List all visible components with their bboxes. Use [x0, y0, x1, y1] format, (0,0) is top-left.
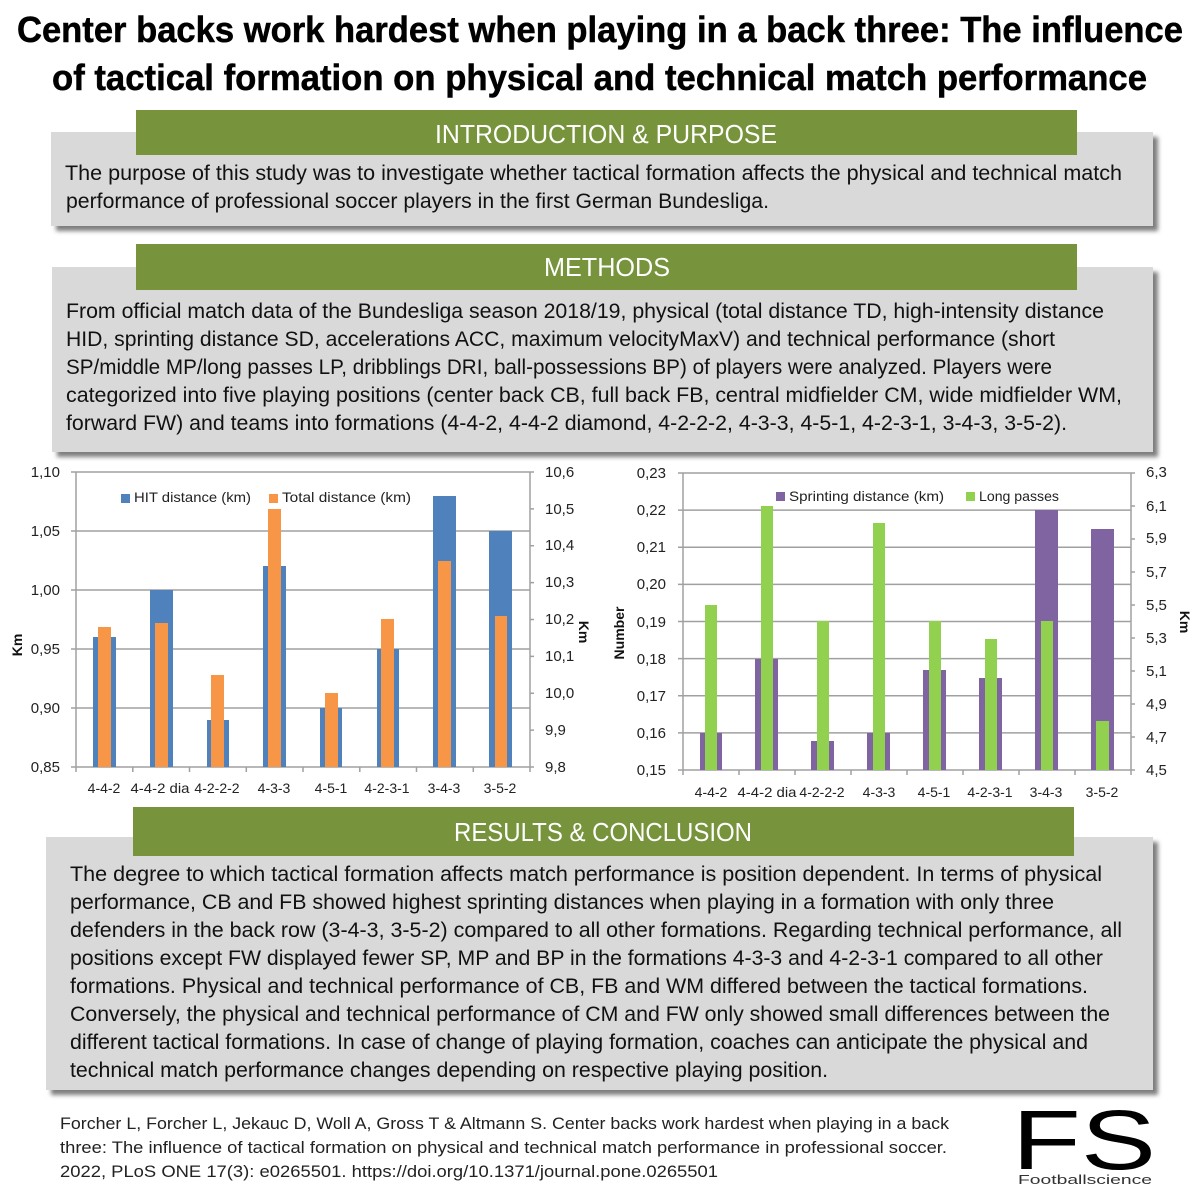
category labels: 4-4-2 dia — [130, 780, 190, 796]
category labels — [695, 784, 1119, 800]
title: Center backs work hardest when playing in a back three: The influence — [17, 9, 1183, 50]
left axis labels: 0,20 — [637, 576, 666, 593]
axis title: left Km: Km — [9, 634, 25, 656]
left axis labels: 1,00 — [31, 582, 60, 599]
right axis labels: 5,3 — [1146, 630, 1167, 647]
right axis labels: 10,3 — [545, 574, 574, 591]
text: methods: HID, sprinting distance SD, accelerations ACC, maximum velocityMaxV) and technical performance (short — [66, 328, 1055, 351]
legend: HIT distance (km) — [134, 489, 251, 505]
category labels: 4-4-2 — [695, 784, 728, 800]
category labels: 4-4-2 dia — [738, 784, 797, 800]
category labels: 4-2-2-2 — [194, 780, 240, 796]
gridlines and axes — [678, 473, 1135, 775]
citation: three: The influence of tactical formation on physical and technical match performance in professional soccer. — [60, 1138, 947, 1157]
panel: methods — [52, 244, 1153, 452]
category labels: 4-4-2 — [88, 780, 121, 796]
chart: HIT distance and total distance — [9, 464, 592, 796]
bars: HIT distance — [93, 496, 512, 767]
axis title: Number: Number — [611, 606, 627, 659]
legend: Sprinting distance (km) — [789, 488, 944, 504]
right axis labels: 10,4 — [545, 537, 574, 554]
right axis labels: 6,3 — [1146, 464, 1167, 481]
citation: Forcher L, Forcher L, Jekauc D, Woll A, Gross T & Altmann S. Center backs work hardest when playing in a back — [60, 1114, 950, 1133]
legend: Total distance (km) — [282, 489, 411, 505]
right axis labels — [1146, 464, 1167, 779]
bars: sprinting distance — [700, 510, 1114, 770]
right axis labels: 5,1 — [1146, 663, 1167, 680]
citation: 2022, PLoS ONE 17(3): e0265501. https://doi.org/10.1371/journal.pone.0265501 — [60, 1162, 718, 1181]
right axis labels: 10,6 — [545, 464, 574, 481]
category labels: 4-5-1 — [918, 784, 951, 800]
category labels — [88, 780, 517, 796]
axis title: right Km: Km — [1177, 611, 1193, 633]
left axis labels: 0,21 — [637, 539, 666, 556]
legend: Long passes — [979, 488, 1059, 504]
category labels: 3-4-3 — [428, 780, 461, 796]
category labels: 4-3-3 — [258, 780, 291, 796]
heading: results and conclusion: RESULTS & CONCLUSION — [454, 817, 752, 847]
text: methods: SP/middle MP/long passes LP, dribblings DRI, ball-possessions BP) of players were analyzed. Players were — [66, 356, 1052, 379]
title — [17, 9, 1183, 98]
heading: results and conclusion — [133, 807, 1074, 856]
left axis labels: 0,18 — [637, 651, 666, 668]
bars: long passes — [705, 506, 1109, 770]
right axis labels: 9,9 — [545, 722, 566, 739]
left axis labels: 0,85 — [31, 759, 60, 776]
category labels: 4-3-3 — [863, 784, 896, 800]
right axis labels — [545, 464, 574, 776]
right axis labels: 5,5 — [1146, 597, 1167, 614]
left axis labels: 0,17 — [637, 688, 666, 705]
left axis labels — [31, 464, 60, 776]
left axis labels: 0,95 — [31, 641, 60, 658]
logo: Footballscience: FS — [1012, 1093, 1156, 1187]
bars: total distance — [98, 509, 507, 767]
text: results: positions except FW displayed fewer SP, MP and BP in the formations 4-3-3 and 4-2-3-1 compared to all other — [70, 947, 1103, 970]
axis title: right Km: Km — [576, 621, 592, 643]
text: purpose: The purpose of this study was to investigate whether tactical formation affects the physical and technical match — [65, 162, 1122, 185]
text: results: The degree to which tactical formation affects match performance is position dependent. In terms of physical — [70, 863, 1102, 886]
text: methods: categorized into five playing positions (center back CB, full back FB, central midfielder CM, wide midfielder WM, — [66, 384, 1122, 407]
logo: Footballscience: Footballscience — [1018, 1172, 1152, 1187]
left axis labels — [637, 465, 666, 779]
left axis labels: 1,10 — [31, 464, 60, 481]
right axis labels: 10,2 — [545, 611, 574, 628]
category labels: 4-2-3-1 — [364, 780, 410, 796]
category labels: 4-2-3-1 — [967, 784, 1013, 800]
right axis labels: 6,1 — [1146, 498, 1167, 515]
text: results: performance, CB and FB showed highest sprinting distances when playing in a formation with only three — [70, 891, 1054, 914]
category labels: 4-2-2-2 — [799, 784, 845, 800]
text: results: formations. Physical and technical performance of CB, FB and WM differed between the tactical formations. — [70, 975, 1088, 998]
right axis labels: 4,9 — [1146, 696, 1167, 713]
legend — [776, 488, 1059, 504]
heading: introduction and purpose: INTRODUCTION & PURPOSE — [435, 119, 777, 149]
text: results: technical match performance changes depending on respective playing position. — [70, 1059, 828, 1082]
left axis labels: 0,23 — [637, 465, 666, 482]
text: results — [70, 863, 1122, 1082]
left axis labels: 0,90 — [31, 700, 60, 717]
title: of tactical formation on physical and technical match performance — [52, 57, 1147, 98]
category labels: 4-5-1 — [315, 780, 348, 796]
right axis labels: 10,0 — [545, 685, 574, 702]
citation — [60, 1114, 950, 1181]
chart: sprinting distance and long passes — [611, 464, 1193, 800]
category labels: 3-5-2 — [484, 780, 517, 796]
right axis labels: 10,5 — [545, 501, 574, 518]
heading: introduction and purpose — [136, 110, 1077, 155]
category labels: 3-4-3 — [1030, 784, 1063, 800]
right axis labels: 5,7 — [1146, 564, 1167, 581]
text: purpose — [65, 162, 1122, 213]
right axis labels: 10,1 — [545, 648, 574, 665]
right axis labels: 4,7 — [1146, 729, 1167, 746]
text: methods — [66, 300, 1122, 435]
left axis labels: 0,16 — [637, 725, 666, 742]
text: methods: forward FW) and teams into formations (4-4-2, 4-4-2 diamond, 4-2-2-2, 4-3-3, 4-5-1, 4-2-3-1, 3-4-3, 3-5-2). — [66, 412, 1067, 435]
text: results: Conversely, the physical and technical performance of CM and FW only showed small differences between the — [70, 1003, 1110, 1026]
right axis labels: 4,5 — [1146, 762, 1167, 779]
heading: methods: METHODS — [544, 252, 670, 282]
left axis labels: 0,19 — [637, 614, 666, 631]
panel: results and conclusion — [46, 807, 1153, 1090]
right axis labels: 9,8 — [545, 759, 566, 776]
text: results: defenders in the back row (3-4-3, 3-5-2) compared to all other formations. Regarding technical performance, all — [70, 919, 1122, 942]
text: methods: From official match data of the Bundesliga season 2018/19, physical (total distance TD, high-intensity distance — [66, 300, 1104, 323]
category labels: 3-5-2 — [1086, 784, 1119, 800]
left axis labels: 0,22 — [637, 502, 666, 519]
panel: introduction and purpose — [51, 110, 1153, 226]
text: results: different tactical formations. In case of change of playing formation, coaches can anticipate the physical and — [70, 1031, 1088, 1054]
gridlines and axes — [71, 472, 534, 772]
legend — [121, 489, 411, 505]
heading: methods — [136, 244, 1077, 290]
left axis labels: 0,15 — [637, 762, 666, 779]
left axis labels: 1,05 — [31, 523, 60, 540]
text: purpose: performance of professional soccer players in the first German Bundesliga. — [66, 190, 769, 213]
right axis labels: 5,9 — [1146, 530, 1167, 547]
